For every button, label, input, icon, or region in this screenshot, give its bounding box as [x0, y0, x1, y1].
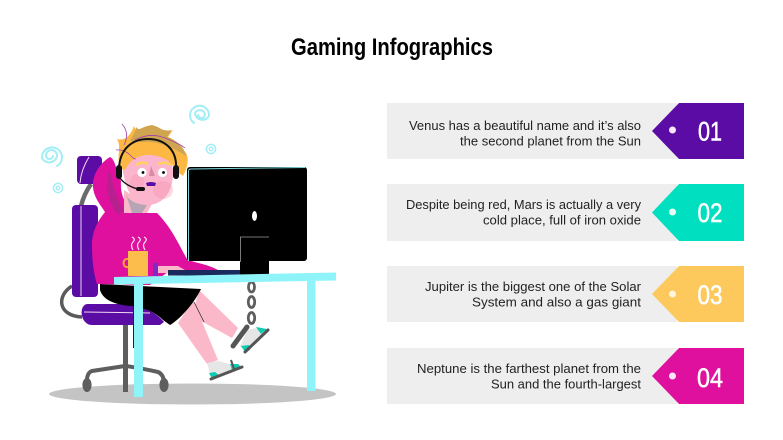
number: 02: [698, 198, 722, 228]
arrow tag: [652, 348, 744, 404]
hood shadow: [107, 170, 124, 215]
text block: Sun and the fourth-largest: [491, 376, 641, 392]
monitor: [187, 167, 307, 276]
text block: Despite being red, Mars is actually a very: [406, 197, 641, 212]
dot: [669, 208, 676, 216]
text block: Jupiter is the biggest one of the Solar: [425, 279, 642, 294]
hoodie: [92, 157, 218, 285]
title: Gaming Infographics: [291, 34, 493, 61]
row 1: [387, 103, 744, 159]
mug with steam: [124, 237, 158, 276]
number: 04: [697, 363, 723, 393]
dot: [669, 126, 676, 134]
panel: text background: [387, 348, 677, 404]
shorts: [100, 284, 201, 325]
arrow tag: [652, 184, 744, 241]
desk: [114, 272, 336, 397]
text block: Neptune is the farthest planet from the: [417, 361, 641, 376]
headset: [116, 139, 179, 191]
dot: [669, 372, 676, 380]
row 2: [387, 184, 744, 241]
icon: dizzy spirals: [42, 106, 216, 193]
panel: text background: [387, 266, 677, 322]
number: 01: [698, 116, 722, 146]
text block: Venus has a beautiful name and it’s also: [409, 118, 641, 133]
hair: [116, 124, 188, 176]
panel: text background: [387, 184, 677, 241]
text block: the second planet from the Sun: [460, 134, 641, 148]
text block: cold place, full of iron oxide: [483, 212, 641, 228]
number: 03: [698, 280, 722, 310]
chain: [248, 282, 255, 324]
legs: [178, 290, 238, 364]
cheeks and eyes: [130, 163, 173, 199]
floor shadow: [49, 384, 336, 404]
text block: System and also a gas giant: [472, 294, 641, 310]
row 4: [387, 348, 744, 404]
feet and sandals: [207, 327, 268, 379]
dot: [669, 290, 676, 298]
neck: [124, 190, 152, 213]
office chair: [62, 156, 169, 392]
face: [122, 147, 173, 205]
arrow tag: [652, 103, 744, 159]
panel: text background: [387, 103, 677, 159]
illustration: gamer at desk: [42, 106, 336, 405]
row 3: [387, 266, 744, 322]
forearm and keyboard: [158, 266, 240, 276]
arrow tag: [652, 266, 744, 322]
